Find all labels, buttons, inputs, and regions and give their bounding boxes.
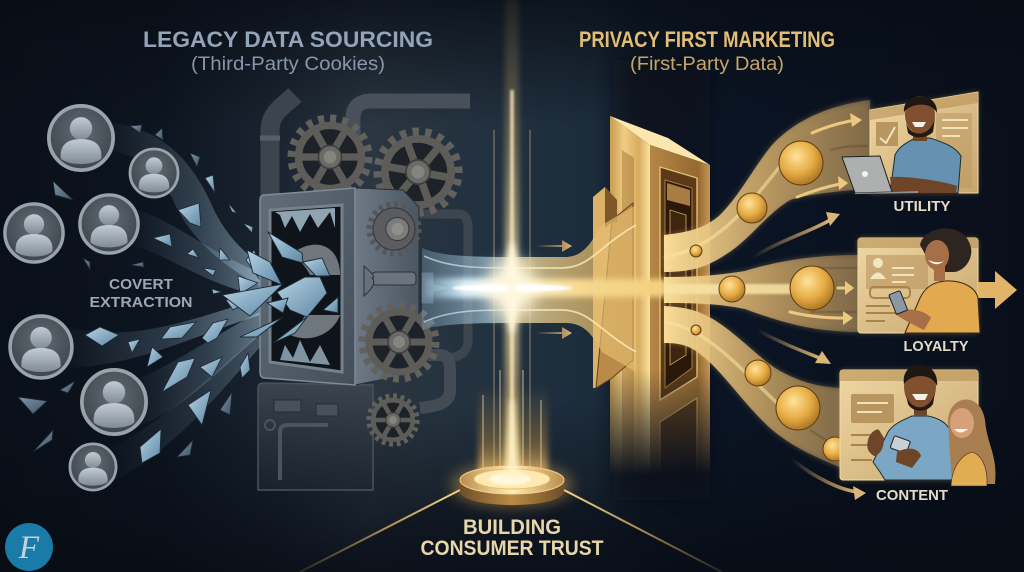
- broken data shards: [18, 125, 260, 463]
- front gears: [363, 205, 435, 444]
- machine front panel: [260, 188, 355, 385]
- trust pedestal: [300, 400, 722, 572]
- logo badge: [5, 523, 53, 571]
- person: man pointing: [867, 365, 958, 480]
- heading: legacy data sourcing: LEGACY DATA SOURCING: [143, 27, 433, 52]
- label: content: CONTENT: [876, 487, 948, 504]
- machine mouth: [270, 205, 342, 372]
- gate inner recess: [660, 167, 697, 400]
- lower cabinet: [258, 383, 373, 490]
- label: building consumer trust: CONSUMER TRUST: [420, 537, 604, 560]
- flow ribbons: [664, 100, 870, 468]
- machine: [222, 95, 470, 490]
- label: covert extraction: EXTRACTION: [90, 294, 192, 311]
- rear gate leaf: [593, 187, 633, 388]
- heading: privacy first marketing: [579, 27, 835, 75]
- panel: utility: [842, 92, 978, 194]
- inbound small arrows: [536, 240, 572, 339]
- heading: privacy first marketing: PRIVACY FIRST MARKETING: [579, 27, 835, 52]
- label: covert extraction: COVERT: [109, 276, 173, 293]
- panel: loyalty: [858, 228, 1017, 333]
- back gears: [292, 119, 464, 218]
- rear nozzle: [421, 272, 452, 304]
- central convergence stream: [422, 205, 667, 372]
- vertical light beam: [478, 0, 548, 480]
- label: building consumer trust: [420, 516, 604, 560]
- heading: legacy data sourcing: (Third-Party Cookies): [191, 54, 385, 75]
- machine handle: [364, 266, 416, 296]
- person: woman with phone: [889, 228, 980, 333]
- heading: legacy data sourcing: [143, 27, 433, 75]
- heading: privacy first marketing: (First-Party Data): [630, 54, 784, 75]
- crushed shards in mouth: [222, 232, 338, 343]
- panel: content: [840, 365, 996, 486]
- pipes: [260, 95, 470, 408]
- privacy gate: [610, 116, 710, 490]
- person: man with laptop: [890, 96, 961, 193]
- label: utility: UTILITY: [894, 198, 950, 215]
- flow arrows: [752, 113, 866, 500]
- avatars: [5, 106, 178, 490]
- exit arrow: [978, 271, 1017, 309]
- data orbs: [690, 141, 847, 461]
- laptop: [842, 156, 918, 194]
- logo badge: F: [18, 530, 40, 566]
- label: loyalty: LOYALTY: [904, 338, 968, 355]
- label: covert extraction: [90, 276, 192, 311]
- machine body side panel: [355, 188, 419, 385]
- person: woman with long hair: [948, 400, 996, 486]
- label: building consumer trust: BUILDING: [463, 516, 561, 539]
- extraction streams: [60, 122, 285, 482]
